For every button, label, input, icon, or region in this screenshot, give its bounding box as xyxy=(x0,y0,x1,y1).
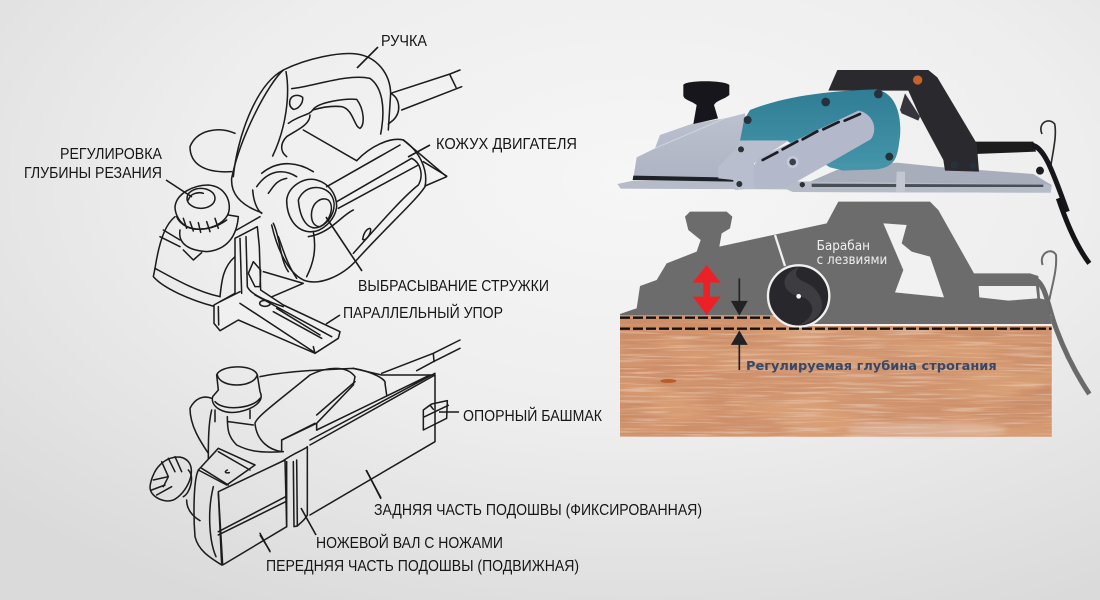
sole bracket xyxy=(896,172,905,192)
support shoe xyxy=(423,401,448,430)
black cable continuation xyxy=(1058,198,1089,263)
housing screws xyxy=(744,90,976,169)
handle grip xyxy=(900,93,920,121)
label: depth adjustment line 2: ГЛУБИНЫ РЕЗАНИЯ xyxy=(24,165,162,182)
chute slots xyxy=(763,114,860,160)
chip ejection port xyxy=(287,179,337,232)
middle plate xyxy=(718,141,788,190)
rear knob xyxy=(190,367,283,458)
label: handle: РУЧКА xyxy=(381,33,428,50)
label: depth adjustment: РЕГУЛИРОВКА xyxy=(60,146,163,163)
orange button xyxy=(913,75,922,85)
chute screw xyxy=(787,156,799,168)
label: motor housing: КОЖУХ ДВИГАТЕЛЯ xyxy=(436,136,577,153)
cable xyxy=(1032,145,1067,212)
drum label: с лезвиями xyxy=(817,253,887,268)
knob xyxy=(683,81,729,124)
label: parallel fence: ПАРАЛЛЕЛЬНЫЙ УПОР xyxy=(343,304,503,322)
cable xyxy=(382,340,460,373)
black arrow down xyxy=(732,278,746,314)
motor housing xyxy=(253,139,447,282)
drum label: Барабан xyxy=(817,239,870,254)
label: support shoe: ОПОРНЫЙ БАШМАК xyxy=(463,407,602,425)
white line under sole xyxy=(813,324,1052,326)
labels xyxy=(24,33,702,575)
ejection chute xyxy=(754,111,874,189)
diagram: planer bottom view xyxy=(150,340,460,565)
cutter drum xyxy=(768,265,829,327)
grey cable xyxy=(1033,278,1089,394)
cord guard xyxy=(975,142,1036,154)
drum label xyxy=(817,239,887,268)
base plate xyxy=(617,181,1052,193)
handle top xyxy=(255,368,435,452)
rear knob xyxy=(190,130,235,172)
small screws xyxy=(736,146,805,187)
handle opening xyxy=(883,223,944,297)
dashed lines xyxy=(620,318,1052,329)
teal housing xyxy=(740,89,900,171)
front stripe xyxy=(633,176,733,182)
front shoe xyxy=(153,162,447,307)
white divider xyxy=(775,235,785,266)
body xyxy=(633,113,752,180)
handle xyxy=(828,70,979,172)
sole slot xyxy=(812,184,1043,187)
depth wheel xyxy=(150,457,200,521)
photo: electric planer xyxy=(617,70,1067,212)
red double arrow xyxy=(693,265,721,315)
rear sole xyxy=(310,373,435,515)
hook xyxy=(1042,251,1056,300)
label: rear sole: ЗАДНЯЯ ЧАСТЬ ПОДОШВЫ (ФИКСИРОВАННАЯ) xyxy=(374,502,702,519)
rear screw xyxy=(1036,167,1044,175)
black arrow up xyxy=(732,332,746,370)
hook xyxy=(1041,121,1055,172)
diagram: planer top view xyxy=(153,54,462,353)
depth label: Регулируемая глубина строгания xyxy=(746,358,997,373)
handle xyxy=(232,54,399,213)
parallel fence xyxy=(214,227,340,353)
diagram: planing depth cross-section xyxy=(620,198,1089,437)
planer silhouette xyxy=(620,202,1052,324)
cord opening xyxy=(979,286,1037,301)
body ridge xyxy=(655,118,725,148)
wood board xyxy=(620,315,1052,437)
cutter shaft xyxy=(283,447,307,527)
label: cutter shaft: НОЖЕВОЙ ВАЛ С НОЖАМИ xyxy=(316,534,503,552)
depth knob xyxy=(175,185,238,260)
front sole xyxy=(194,448,287,565)
rear sole block xyxy=(793,163,1052,193)
leader lines xyxy=(166,47,459,551)
label: chip ejection: ВЫБРАСЫВАНИЕ СТРУЖКИ xyxy=(358,278,549,295)
label: front sole: ПЕРЕДНЯЯ ЧАСТЬ ПОДОШВЫ (ПОДВИЖНАЯ) xyxy=(266,558,579,575)
cable xyxy=(391,70,462,110)
